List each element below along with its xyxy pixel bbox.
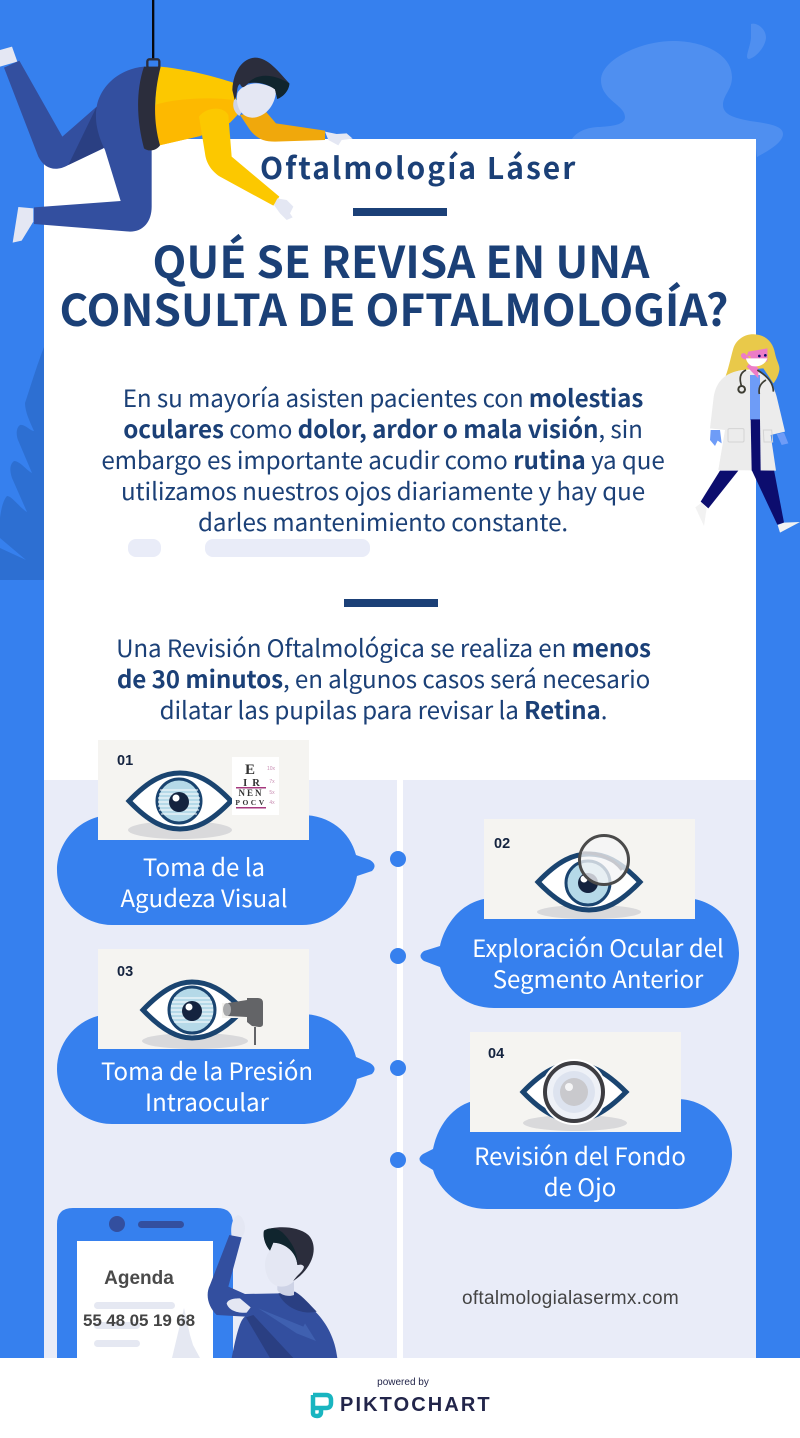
step 01 picture: eye chart: POCV (235, 798, 267, 807)
intro paragraph: utilizamos nuestros ojos diariamente y hay que (121, 472, 645, 507)
step 01 picture: eye chart: NEN (238, 788, 264, 798)
central timeline line (397, 780, 403, 1358)
step 1 label: Toma de la (143, 848, 265, 883)
agenda label: Agenda (104, 1268, 174, 1289)
step 2 label (472, 929, 724, 995)
step 01 picture: eye chart: 01 (117, 753, 133, 769)
step 3 label (101, 1052, 313, 1118)
bubble 3 (57, 1014, 375, 1124)
step 4 label: Revisión del Fondo (474, 1137, 686, 1172)
footer: piktochart wordmark: PIKTOCHART (340, 1394, 492, 1416)
step 4 label (474, 1137, 686, 1203)
duration paragraph: dilatar las pupilas para revisar la Retina. (160, 691, 607, 726)
step 01 picture: eye chart: 10x (267, 766, 276, 772)
white content panel (44, 139, 756, 780)
step 02 picture: magnifying lens: 02 (494, 836, 510, 852)
step 01 picture: eye chart: 7x (269, 779, 275, 785)
decorative leaf left (0, 347, 44, 580)
illustration: doctor with mask (696, 334, 800, 533)
timeline dots (390, 851, 406, 1168)
heading dividers (344, 208, 447, 607)
title: Oftalmología Láser (260, 144, 577, 188)
step 01 picture: eye chart: IR (243, 778, 265, 789)
duration paragraph: de 30 minutos, en algunos casos será necesario (117, 660, 650, 695)
step 03 picture: tonometer: 03 (117, 964, 133, 980)
duration paragraph (116, 629, 651, 726)
step 2 label: Exploración Ocular del (472, 929, 724, 964)
step 01 picture: eye chart: 4x (269, 800, 275, 806)
lavender steps panel (44, 780, 756, 1358)
intro paragraph: oculares como dolor, ardor o mala visión, sin (123, 410, 643, 445)
heading: QUÉ SE REVISA EN UNA (153, 227, 649, 291)
bubble 4 (420, 1099, 732, 1209)
step 1 label: Agudeza Visual (120, 879, 288, 914)
step 3 label: Intraocular (145, 1083, 269, 1118)
step 01 picture: eye chart: 5x (269, 790, 275, 796)
intro paragraph: darles mantenimiento constante. (198, 503, 568, 538)
heading (59, 227, 729, 339)
footer: powered by: powered by (377, 1377, 429, 1388)
duration paragraph: Una Revisión Oftalmológica se realiza en menos (116, 629, 651, 664)
intro paragraph: En su mayoría asisten pacientes con molestias (123, 379, 643, 414)
step 4 label: de Ojo (544, 1168, 616, 1203)
placeholder pills (128, 539, 370, 557)
bubble 1 (57, 815, 375, 925)
step 2 label: Segmento Anterior (493, 960, 703, 995)
intro paragraph: embargo es importante acudir como rutina ya que (101, 441, 665, 476)
step 04 picture: fundus lens: 04 (488, 1046, 504, 1062)
heading: CONSULTA DE OFTALMOLOGÍA? (59, 275, 729, 339)
phone number: 55 48 05 19 68 (83, 1311, 195, 1330)
decorative blob top right (572, 24, 783, 157)
step 01 picture: eye chart: E (245, 762, 255, 778)
intro paragraph (101, 379, 665, 538)
step 1 label (120, 848, 288, 914)
bubble 2 (420, 898, 739, 1008)
illustration: man hanging from rope (0, 0, 352, 243)
website: oftalmologialasermx.com (462, 1288, 679, 1309)
step 3 label: Toma de la Presión (101, 1052, 313, 1087)
